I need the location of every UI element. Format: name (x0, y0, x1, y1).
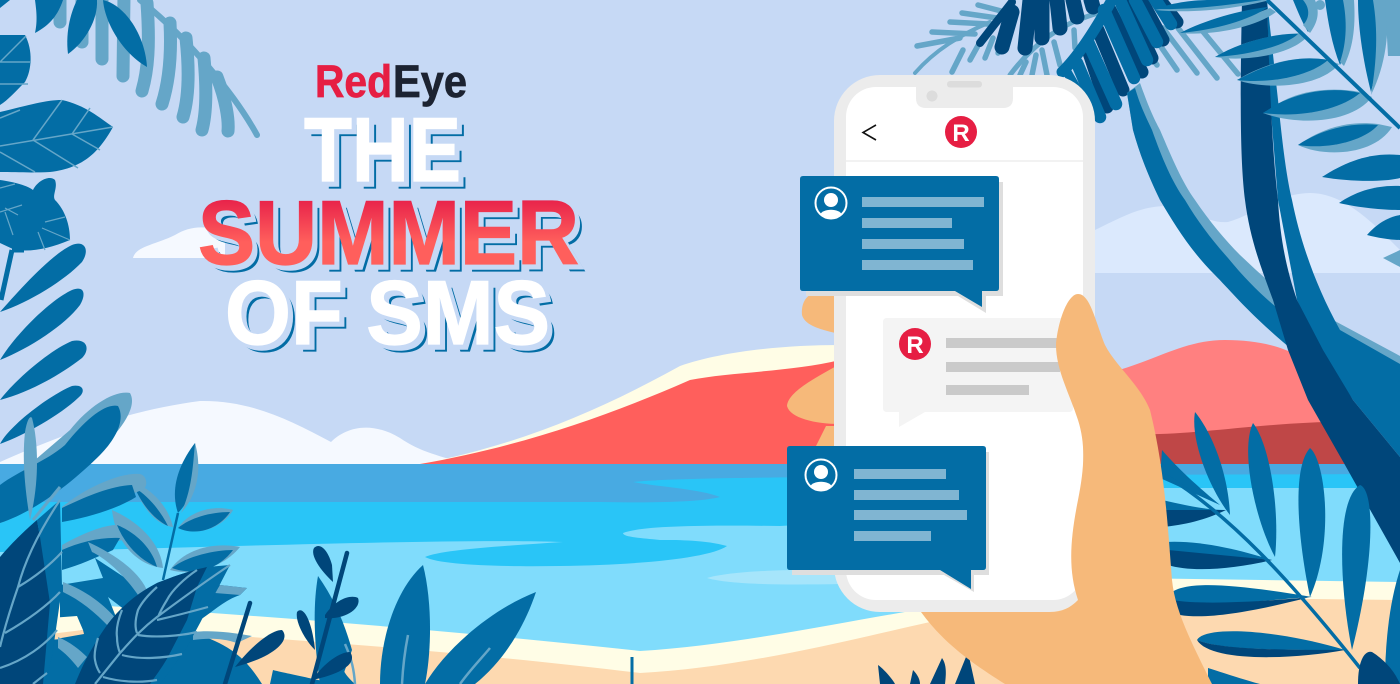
message bubble 2 (883, 318, 1073, 427)
message bubble 3 (787, 446, 989, 592)
text lines (854, 469, 967, 541)
phone body (834, 75, 1095, 612)
RedEye logo: Red (315, 56, 392, 107)
front veined leaf (75, 565, 230, 684)
light frond left (915, 5, 1006, 73)
title: SUMMER: SUMMER (202, 187, 583, 288)
title: SUMMER: SUMMER (198, 183, 579, 284)
mid leaves with light tops (62, 474, 146, 522)
bottom middle plants (225, 546, 632, 684)
fern bottom right (1160, 412, 1400, 684)
RedEye logo (315, 56, 467, 107)
palm trunks (1127, 0, 1400, 563)
header logo (945, 116, 977, 148)
large back leaves (0, 393, 132, 523)
logo (899, 328, 931, 360)
text lines (862, 197, 984, 270)
logo: R (906, 332, 924, 359)
clouds and hills (0, 193, 1400, 465)
red mountain left (420, 345, 840, 464)
palm frond top right with leaflets (1155, 0, 1400, 267)
title: THE: THE (311, 107, 468, 208)
big blue base (40, 632, 262, 684)
avatar (816, 188, 846, 218)
red mountain right (1095, 340, 1360, 465)
light frond centre (1010, 8, 1238, 78)
camera (926, 90, 938, 102)
hand fingers behind phone (787, 293, 840, 446)
small plants by hand (878, 652, 975, 684)
leaflets (1155, 0, 1270, 11)
dark frond (980, 0, 1177, 107)
RedEye logo: Eye (393, 56, 467, 107)
back arrow (863, 125, 876, 140)
hanging leaves (1293, 0, 1400, 95)
beach (0, 578, 1400, 684)
stem leaves (175, 443, 197, 513)
phone screen (846, 87, 1083, 600)
top left blue leaves (0, 0, 147, 67)
title: OF SMS: OF SMS (229, 267, 554, 368)
blue frond (1062, 0, 1171, 117)
top left palm frond (60, 0, 257, 135)
speaker (947, 81, 982, 88)
header divider (846, 160, 1083, 162)
title: OF SMS: OF SMS (225, 263, 550, 364)
bottom left foliage (0, 393, 262, 684)
title: SUMMER: SUMMER (205, 190, 586, 291)
palm fronds top right, behind phone (915, 0, 1238, 117)
message bubble 1 (800, 176, 1003, 313)
sea (0, 464, 1400, 684)
text lines (946, 338, 1060, 395)
left side leaves (0, 35, 113, 444)
front left dark leaf (35, 500, 62, 684)
hand and thumb (921, 294, 1212, 684)
title: THE: THE (304, 100, 461, 201)
header logo: R (952, 120, 970, 147)
phone notch (916, 85, 1013, 108)
title: THE: THE (308, 104, 465, 205)
title: OF SMS: OF SMS (232, 270, 557, 371)
avatar (806, 460, 836, 490)
phone (834, 75, 1095, 612)
